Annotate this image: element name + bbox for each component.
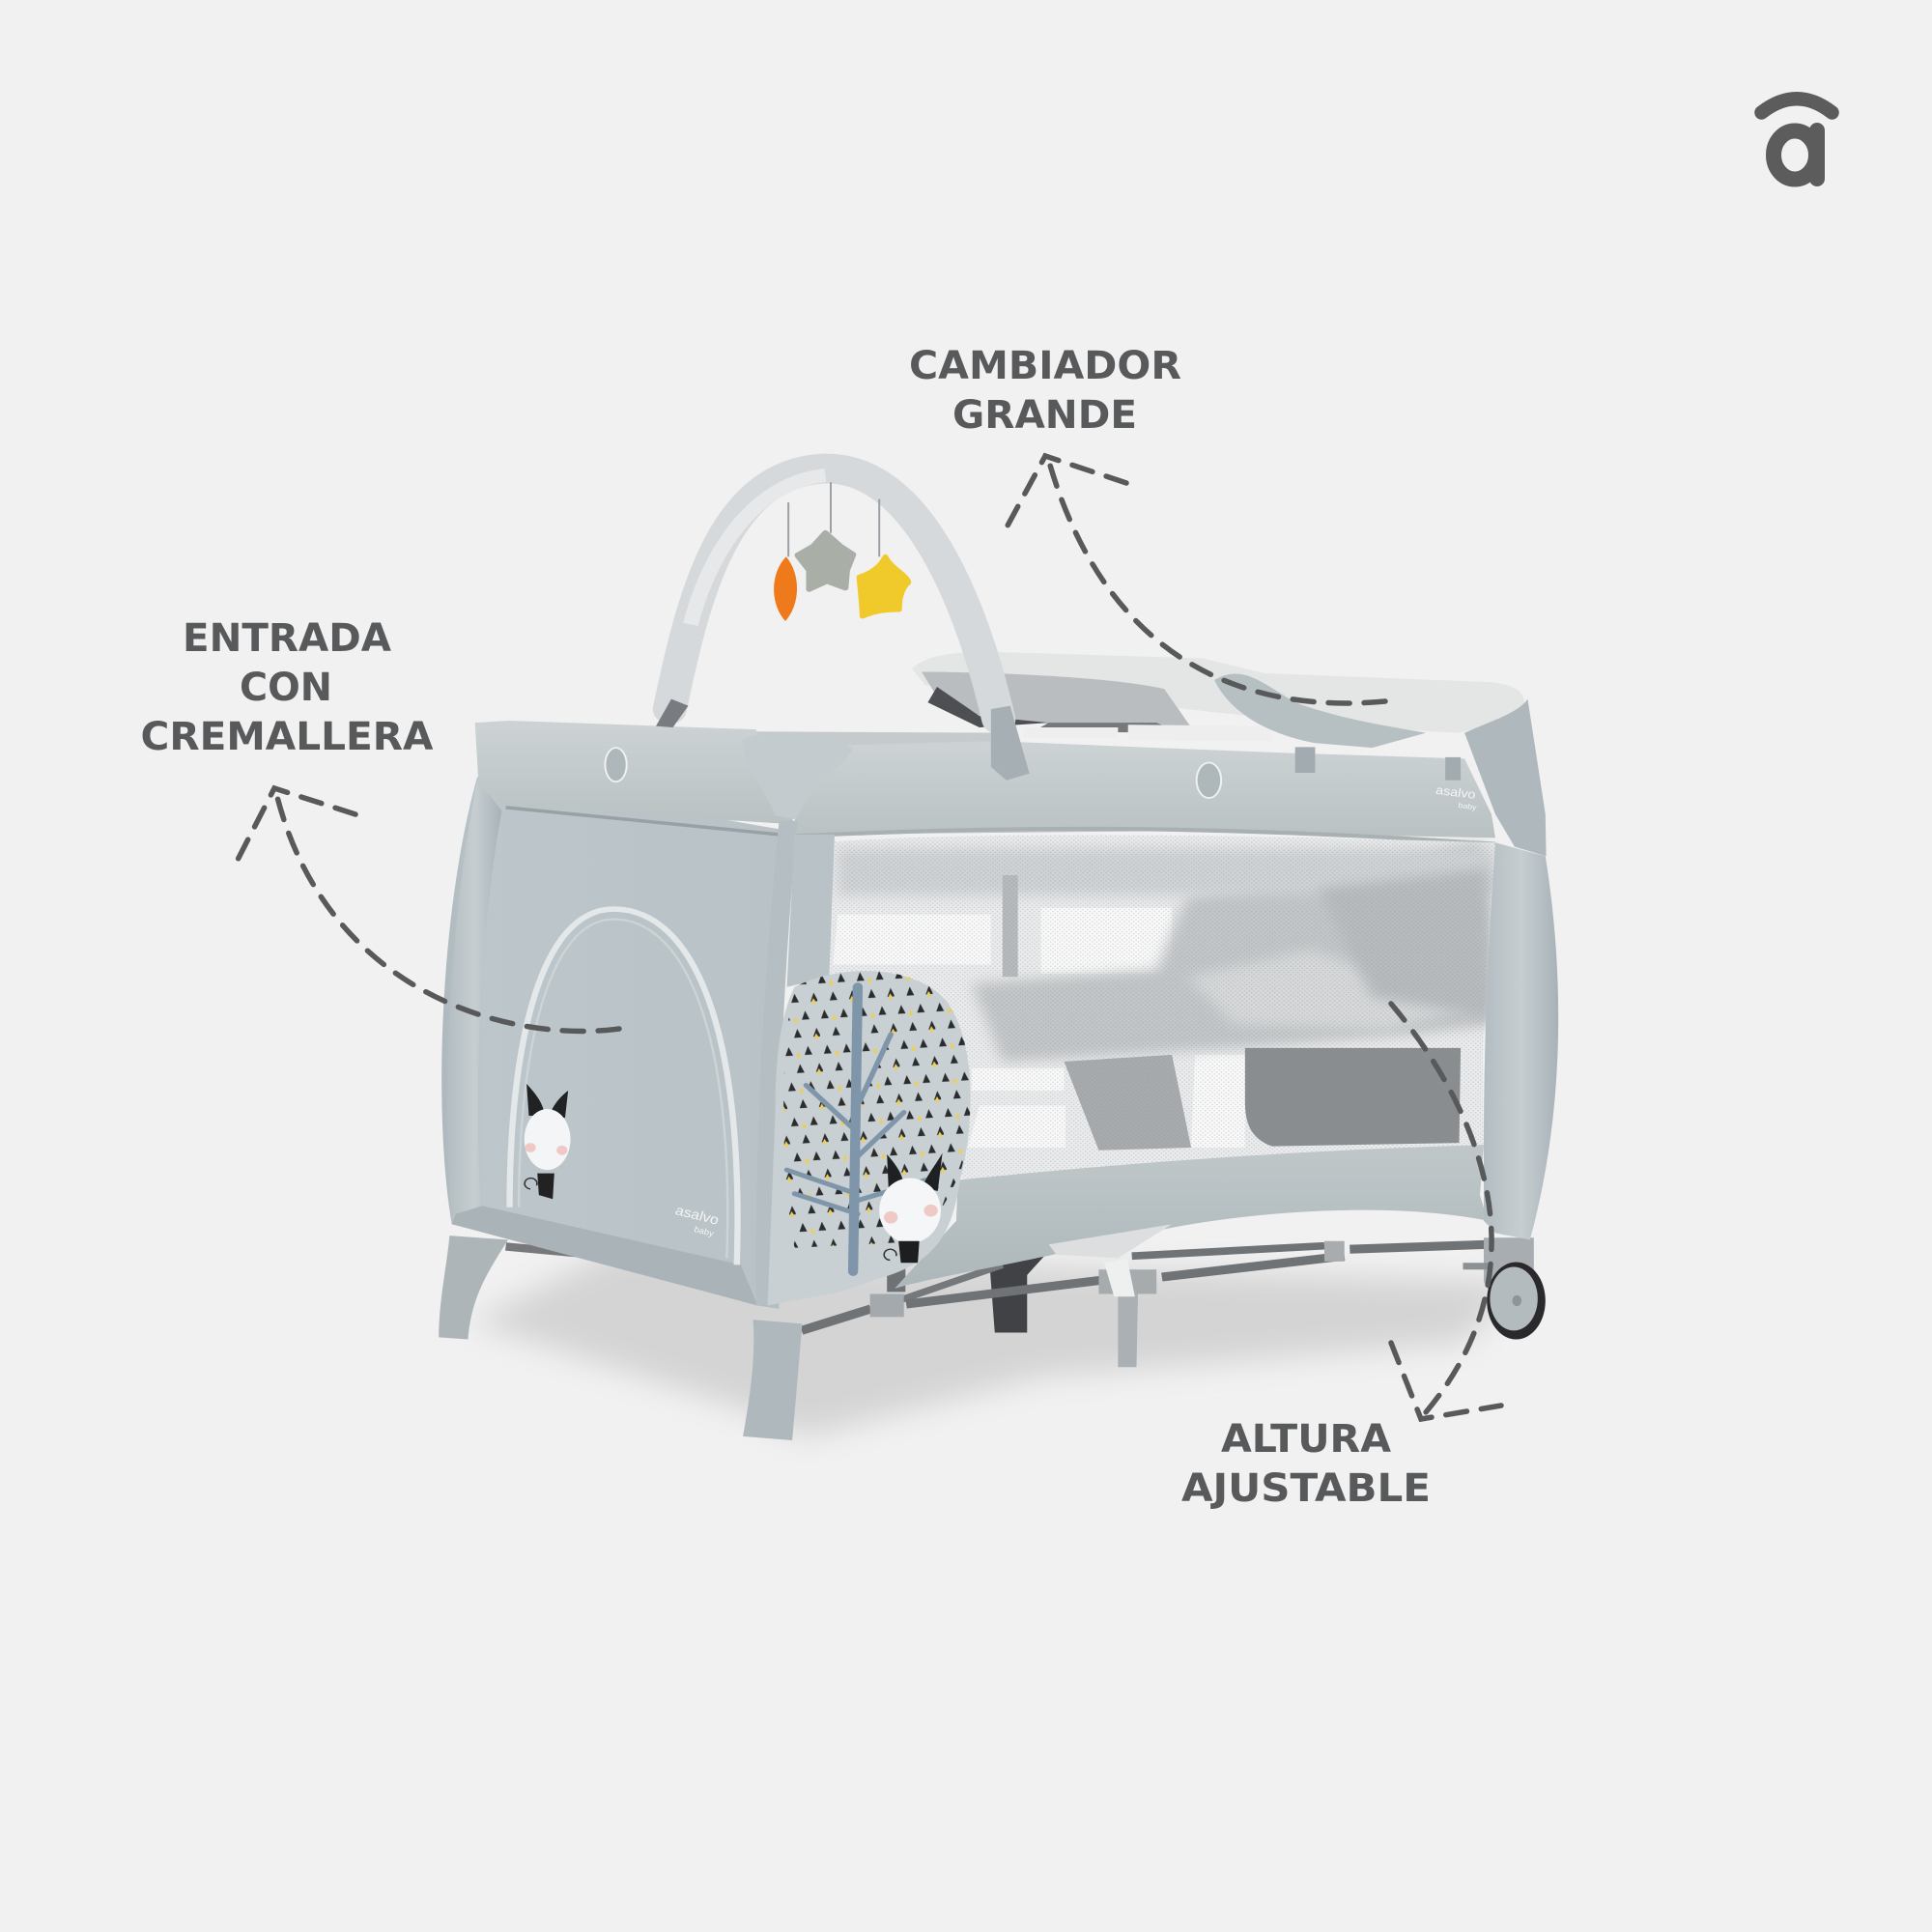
mesh: base <box>829 835 1495 1180</box>
pocket: shape <box>768 971 971 1305</box>
wheel and bracket <box>1463 1237 1546 1340</box>
toy strings <box>788 482 879 556</box>
label: cambiador grande: GRANDE <box>952 393 1137 438</box>
arch: tube <box>669 469 999 720</box>
label: entrada con cremallera <box>141 616 434 759</box>
mesh: folded fabric behind <box>972 841 1499 1062</box>
rim: seam <box>795 829 1495 844</box>
label: entrada con cremallera: ENTRADA <box>183 616 391 661</box>
table: top pad <box>912 652 1524 733</box>
arrow: cambiador <box>1007 456 1385 703</box>
label: altura ajustable: ALTURA <box>1221 1417 1391 1462</box>
rim: brand text <box>1434 783 1481 811</box>
side: top rim <box>475 721 795 824</box>
leg: middle <box>1098 1259 1156 1367</box>
mesh: grid overlay <box>829 835 1495 1180</box>
pocket: tree trunk and branches <box>787 987 925 1271</box>
panel: side face <box>441 777 791 1305</box>
side: zip door <box>510 909 738 1264</box>
panel: front lower band <box>895 1145 1488 1289</box>
mesh: rear box <box>1245 1048 1461 1147</box>
product: travel cot <box>439 469 1558 1440</box>
panel: front rim <box>795 741 1495 838</box>
rim: brand text: asalvo <box>1435 783 1477 802</box>
frame: front rails <box>802 1241 1488 1330</box>
table: gaps under tray <box>1024 724 1272 741</box>
label: cambiador grande <box>909 344 1181 438</box>
label: entrada con cremallera: CREMALLERA <box>141 715 434 759</box>
label: altura ajustable <box>1181 1417 1431 1511</box>
label: entrada con cremallera: CON <box>240 666 332 710</box>
pocket: tree <box>768 971 971 1305</box>
arch: right clip <box>991 706 1030 781</box>
pocket: bunny <box>879 1153 943 1263</box>
arch: left clip <box>656 699 689 727</box>
top rim: rear edge <box>502 723 1003 753</box>
changing table <box>912 652 1547 856</box>
rim: brand text: baby <box>1458 802 1478 811</box>
pocket: triangle foliage <box>783 971 971 1248</box>
side: left pole <box>447 781 502 1228</box>
side: brand text: baby <box>693 1225 716 1238</box>
panel: mesh <box>829 835 1499 1180</box>
leg: front corner <box>743 1320 802 1440</box>
toy: yellow star <box>859 556 909 616</box>
rim: clips <box>1295 747 1461 781</box>
floor shadow <box>471 1248 1519 1437</box>
table: folded flap <box>1214 673 1426 748</box>
corner cap <box>742 733 852 819</box>
frame: centre hub <box>887 1251 1049 1332</box>
toy arch <box>656 469 1030 781</box>
toy: grey star <box>798 533 853 589</box>
toy: orange leaf <box>774 556 797 621</box>
side: seam <box>506 808 780 835</box>
side: brand text: asalvo <box>673 1203 721 1228</box>
arch: highlight <box>691 475 825 624</box>
logo: asalvo a <box>1762 99 1832 180</box>
table: underside <box>922 672 1195 733</box>
front: sag under base <box>1049 1224 1172 1258</box>
side: brand text <box>670 1203 721 1238</box>
side: bunny <box>525 1084 571 1199</box>
mesh: white windows <box>833 908 1245 1148</box>
rim: badge <box>1197 763 1221 798</box>
table: side drape <box>1464 699 1547 856</box>
frame: rear rail <box>506 1246 756 1269</box>
mesh: plant pot <box>1065 1055 1191 1151</box>
panel: right pole <box>1484 842 1558 1239</box>
arrow: altura <box>1391 1004 1501 1419</box>
arrow: entrada <box>238 788 619 1031</box>
side: badge <box>605 748 627 781</box>
corner: pole <box>755 821 798 1309</box>
side: bottom band <box>452 1206 757 1305</box>
label: altura ajustable: AJUSTABLE <box>1181 1466 1431 1511</box>
label: cambiador grande: CAMBIADOR <box>909 344 1181 388</box>
panel: left strip of front <box>787 835 835 987</box>
leg: left <box>439 1236 508 1340</box>
